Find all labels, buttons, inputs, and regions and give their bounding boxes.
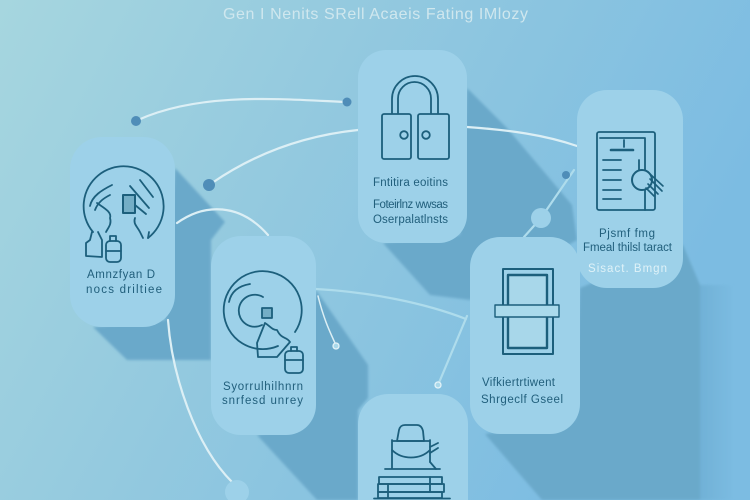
label: Sisact. Bmgn [588, 263, 667, 275]
icon: hands and bottles [84, 166, 164, 262]
label [222, 381, 303, 407]
panel: left card [70, 137, 175, 327]
icon: chair on stacked books [374, 425, 450, 498]
icon: checklist and magnifier [597, 132, 663, 210]
card shadows [93, 88, 735, 500]
label: Pjsmf fmg [599, 228, 655, 240]
label [583, 228, 673, 275]
label: Shrgeclf Gseel [481, 394, 563, 406]
panel: lower left card [211, 236, 316, 435]
panel: top centre card [358, 50, 467, 243]
label: snrfesd unrey [222, 395, 303, 407]
label: Foteirlnz wwsas [373, 199, 448, 211]
panel: right card [577, 90, 683, 288]
panel: bottom centre card [358, 394, 468, 500]
label: Oserpalatlnsts [373, 214, 448, 226]
panel: lower right card [470, 237, 580, 434]
label: Fntitira eoitins [373, 177, 448, 189]
icon: door frame [495, 269, 559, 354]
label [373, 177, 448, 226]
label: Vifkiertrtiwent [482, 377, 556, 389]
label: Syorrulhilhnrn [223, 381, 303, 393]
icon: padlock doors [382, 76, 449, 159]
label [86, 269, 162, 296]
label: Fmeal thilsl taract [583, 242, 673, 254]
connector nodes [131, 98, 570, 500]
title: Gen I Nenits SRell Acaeis Fating IMlozy [223, 6, 528, 23]
label: Amnzfyan D [87, 269, 155, 281]
label: nocs driltiee [86, 284, 162, 296]
connector lines [131, 98, 577, 500]
icon: disc and hand [224, 271, 303, 373]
label [481, 377, 563, 406]
